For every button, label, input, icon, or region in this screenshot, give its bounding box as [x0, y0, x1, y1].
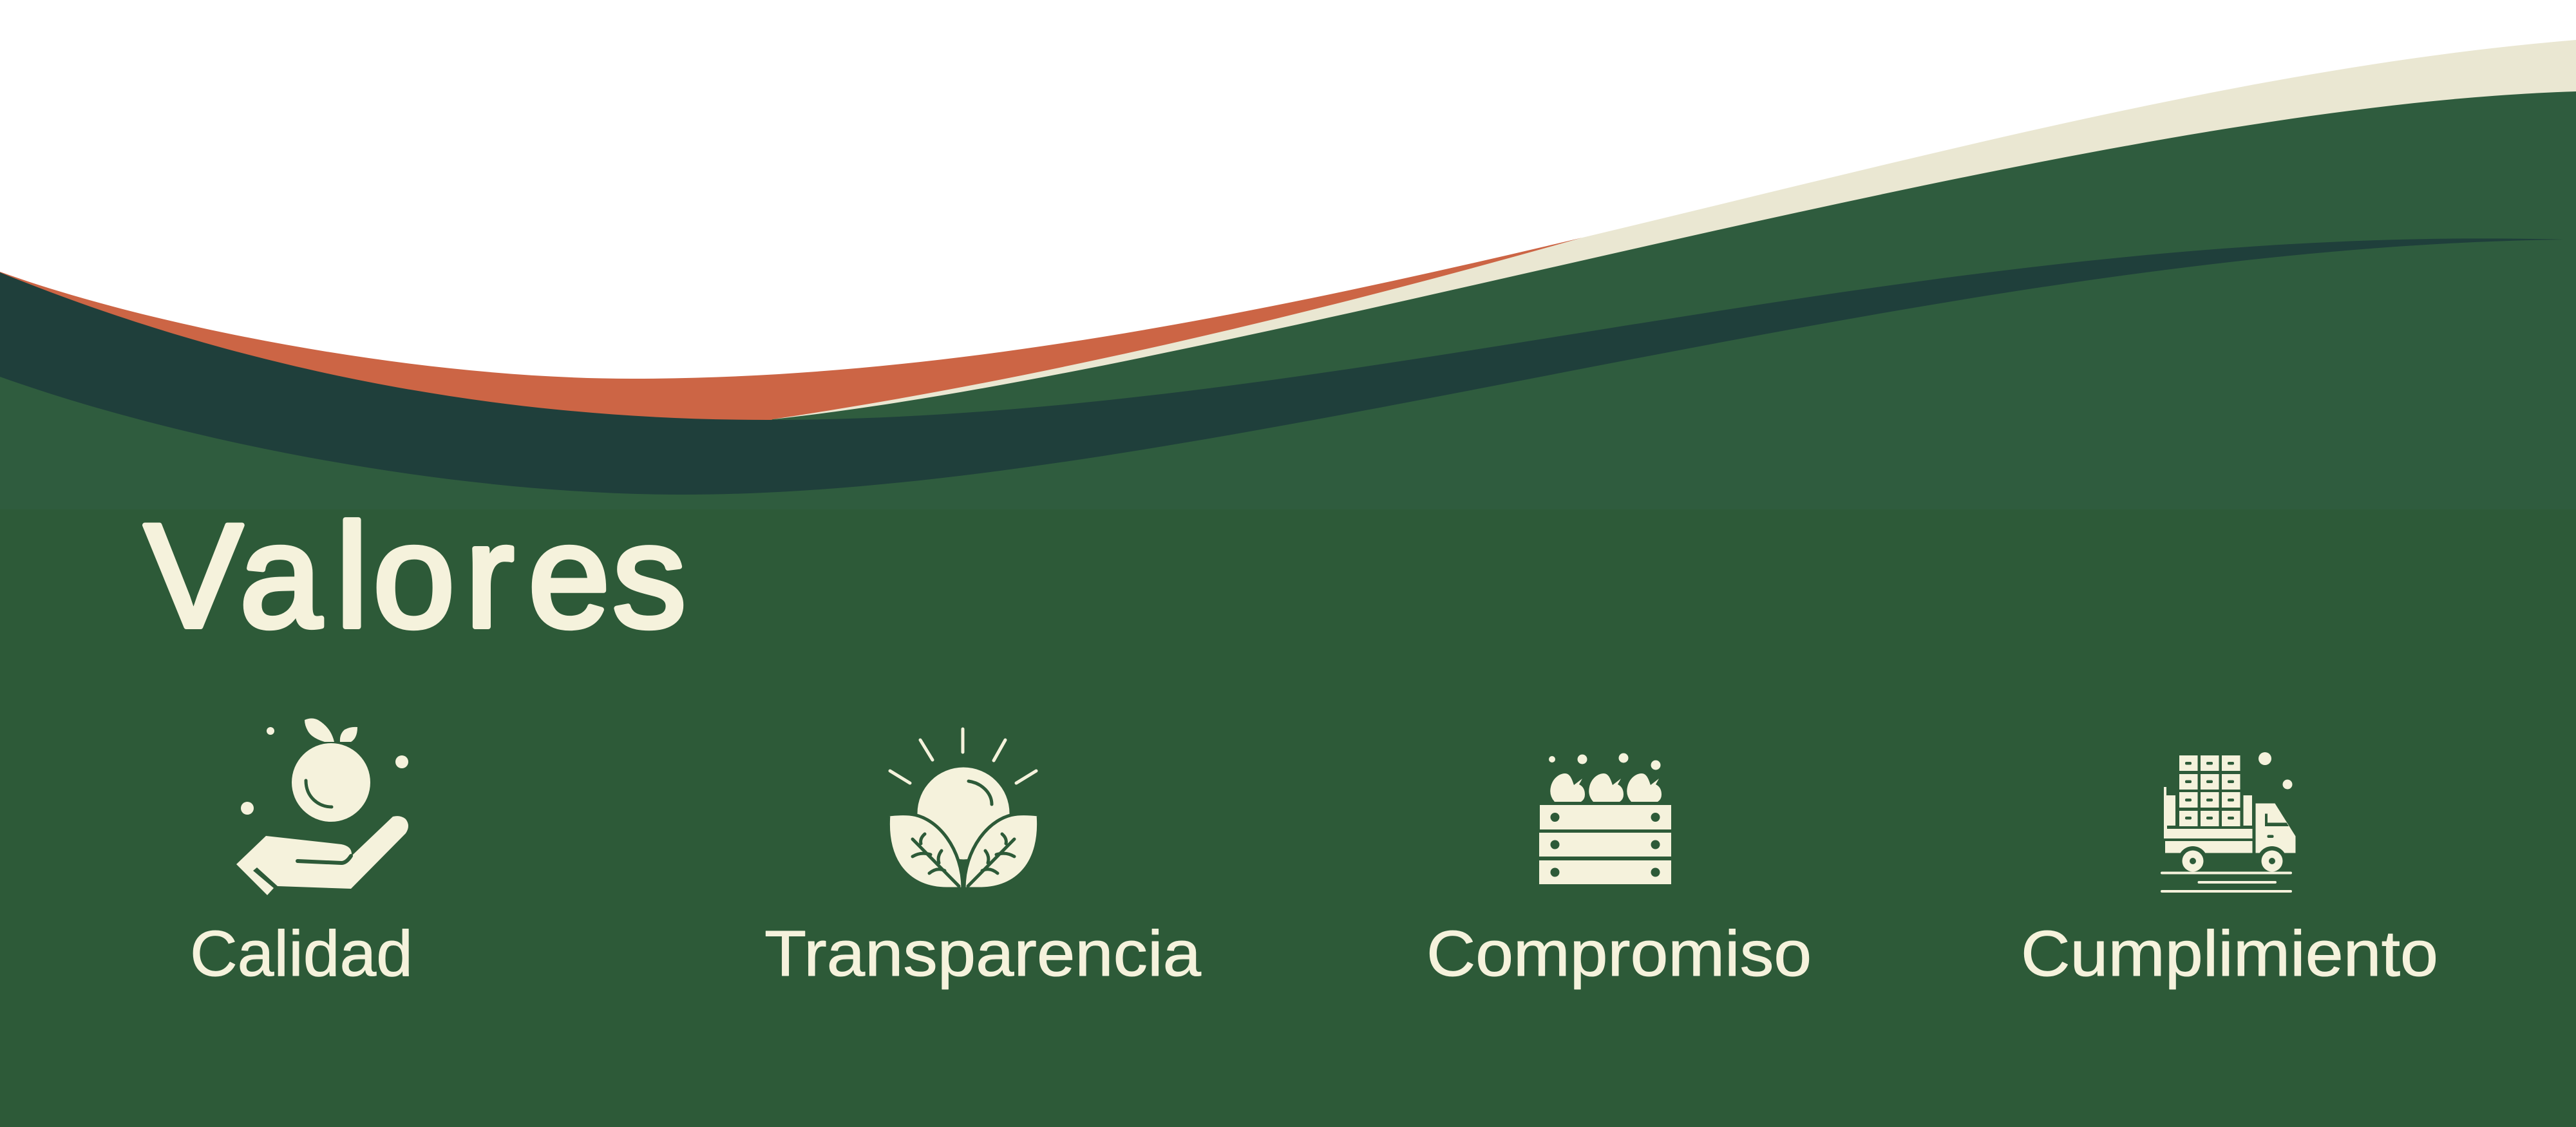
icon: apple held in hand	[236, 719, 408, 895]
title: Valores	[144, 493, 687, 658]
panel: Transparencia	[764, 729, 1201, 990]
panel: Compromiso	[1426, 753, 1812, 990]
label: Transparencia: Transparencia	[764, 918, 1201, 990]
panel: Calidad	[190, 719, 413, 990]
lower green panel	[0, 509, 2576, 1127]
icon part: left leaf	[888, 814, 963, 889]
icon: crate of apples	[1539, 753, 1671, 884]
icon part: right leaf	[964, 814, 1039, 889]
label: Compromiso: Compromiso	[1426, 918, 1812, 990]
icon: sun rising behind two leaves	[888, 729, 1039, 889]
cream wave	[773, 40, 2576, 419]
icon: delivery truck with boxes	[2161, 752, 2295, 893]
dark green swoosh	[0, 238, 2563, 495]
orange wave	[0, 238, 1582, 438]
panel: Cumplimiento	[2021, 752, 2438, 990]
green hill background	[0, 91, 2576, 515]
label: Calidad: Calidad	[190, 918, 413, 990]
label: Cumplimiento: Cumplimiento	[2021, 918, 2438, 990]
